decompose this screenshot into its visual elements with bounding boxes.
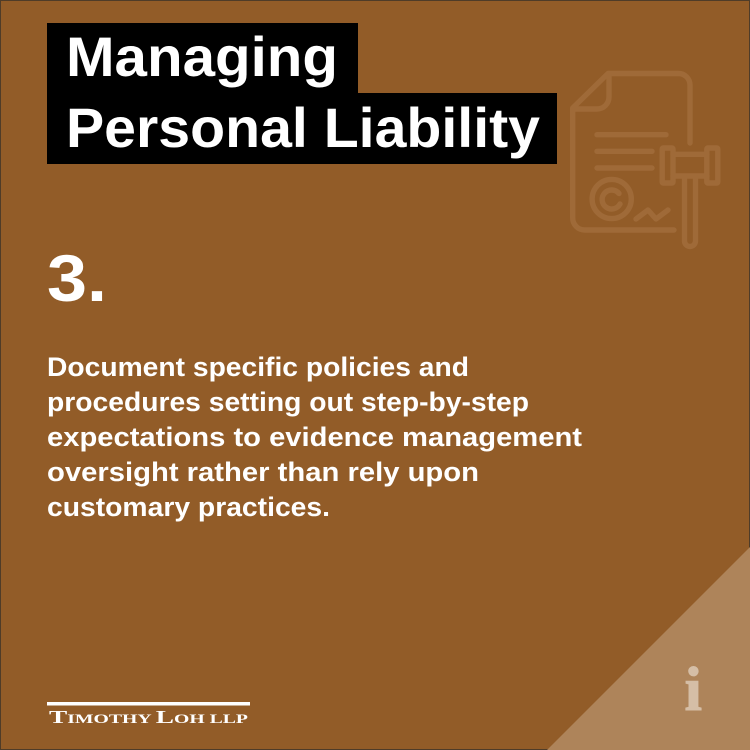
body text [47,352,582,522]
body text: oversight rather than rely upon [47,457,479,487]
info corner: i [684,656,702,724]
body text: Document specific policies and [47,352,469,382]
step number: 3. [47,241,107,315]
logo: Timothy Loh LLP [47,702,250,727]
body text: expectations to evidence management [47,422,582,452]
logo: Timothy Loh LLP: T IMOTHY L OH LLP [49,707,248,727]
body text: procedures setting out step-by-step [47,387,529,417]
info corner [547,547,750,750]
title [47,23,557,164]
body text: customary practices. [47,492,330,522]
title: Managing [66,25,338,88]
title: Personal Liability [66,96,540,159]
icon: document with gavel [573,74,718,247]
